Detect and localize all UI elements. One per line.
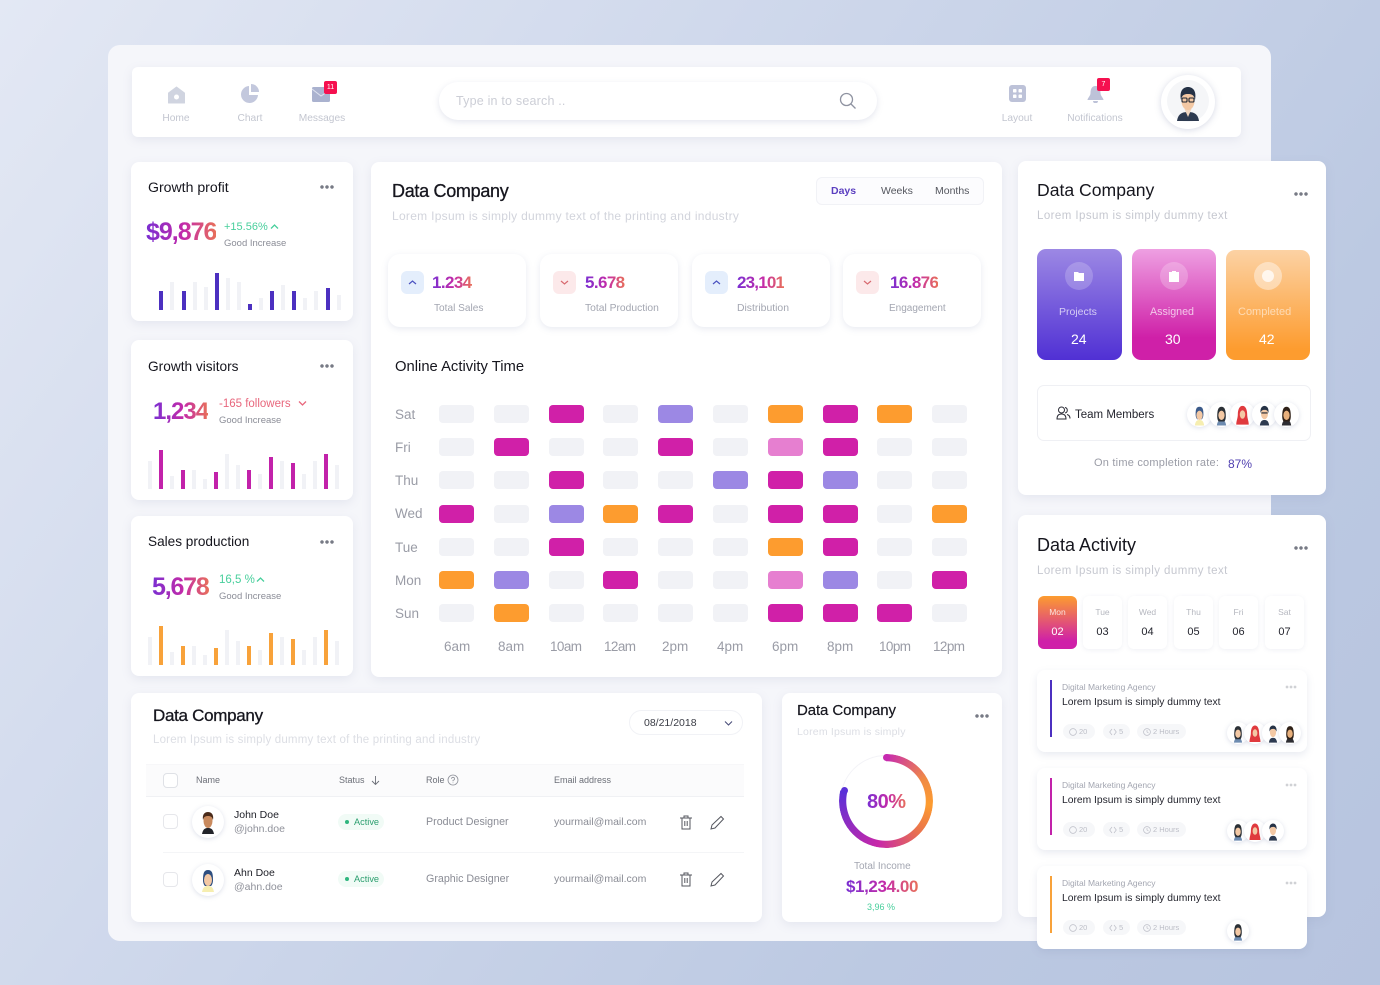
heading: Data Company: [797, 702, 896, 719]
label: Total Production: [585, 303, 659, 314]
status badge: Active: [354, 817, 379, 827]
bar chart: [148, 450, 339, 489]
metadata pills: 2 Hours: [1153, 825, 1179, 834]
panel: data activity: [1018, 515, 1326, 917]
table row: ahn doe: [163, 864, 724, 898]
date: 08/21/2018: [644, 717, 697, 729]
handle: @ahn.doe: [234, 881, 283, 893]
label: Team Members: [1075, 409, 1154, 421]
icon: chart: [241, 84, 259, 103]
gauge value: 80%: [867, 791, 906, 813]
subheading: Lorem Ipsum is simply dummy text of the printing and industry: [392, 209, 739, 223]
arrow down: [856, 271, 879, 294]
value: 30: [1165, 331, 1181, 347]
text: 4pm: [717, 639, 743, 654]
subheading: Lorem Ipsum is simply dummy text: [1037, 210, 1228, 222]
avatar: [192, 864, 224, 896]
checkbox: [163, 773, 178, 788]
icon: delete: [680, 872, 692, 886]
label: chart: Chart: [238, 113, 262, 124]
text: 8am: [498, 639, 524, 654]
caption: Good Increase: [219, 591, 281, 602]
metadata pills: [1063, 822, 1186, 837]
completion value: 87%: [1228, 457, 1252, 471]
text: 03: [1096, 626, 1109, 638]
label: messages: Messages: [299, 113, 345, 124]
value: 24: [1071, 331, 1087, 347]
tab: weeks: Weeks: [881, 185, 913, 197]
name: Ahn Doe: [234, 867, 275, 879]
activity card 1: [1037, 670, 1307, 752]
icon: search: [840, 92, 856, 109]
role: Product Designer: [426, 816, 509, 828]
label: Assigned: [1150, 306, 1194, 318]
panel: total income: [782, 693, 1002, 922]
metadata pills: 2 Hours: [1153, 923, 1179, 932]
metadata pills: 5: [1119, 727, 1123, 736]
icon: [1065, 262, 1093, 290]
chevron up: [270, 224, 278, 229]
text: 04: [1141, 626, 1154, 638]
status badge: [338, 814, 384, 830]
avatar group: [1226, 722, 1302, 746]
avatar group: [1186, 402, 1300, 430]
main panel background: [108, 45, 1271, 941]
icon: [1254, 262, 1282, 290]
category: Digital Marketing Agency: [1062, 682, 1156, 692]
title: Lorem Ipsum is simply dummy text: [1062, 697, 1220, 708]
status badge: Active: [354, 874, 379, 884]
category: Digital Marketing Agency: [1062, 780, 1156, 790]
icon: delete: [680, 816, 692, 830]
text: 07: [1278, 626, 1291, 638]
icon: messages with badge: 11: [327, 84, 334, 91]
metadata pills: 5: [1119, 825, 1123, 834]
text: Mon: [395, 573, 421, 588]
label: Projects: [1059, 306, 1097, 318]
icon: home: [168, 86, 185, 104]
arrow up: [401, 271, 424, 294]
donut gauge 80%: [839, 754, 933, 848]
range tabs: [816, 177, 984, 205]
icon: edit: [710, 816, 724, 830]
bar chart: [148, 626, 339, 665]
top navigation bar: [132, 67, 1241, 137]
text: 6pm: [772, 639, 798, 654]
day: mon 02: Mon: [1049, 607, 1066, 617]
menu dots: [320, 185, 334, 189]
search box: [439, 82, 877, 120]
icon: help: [448, 774, 458, 786]
heading: Growth visitors: [148, 359, 239, 374]
menu dots: [1294, 192, 1308, 196]
panel: data company main: [371, 162, 1002, 677]
label: Total Sales: [434, 303, 483, 314]
text: 6am: [444, 639, 470, 654]
text: 12pm: [933, 639, 964, 654]
tab: days: Days: [831, 185, 856, 197]
text: 2pm: [662, 639, 688, 654]
icon: layout: [1009, 85, 1026, 102]
title: Lorem Ipsum is simply dummy text: [1062, 893, 1220, 904]
panel: sales production: [131, 516, 353, 676]
chevron up: [256, 577, 264, 582]
text: Sat: [395, 407, 415, 422]
menu dots: [1294, 546, 1308, 550]
text: Sun: [395, 606, 419, 621]
stat: total sales: [388, 254, 526, 327]
caption: Good Increase: [224, 238, 286, 249]
heading: Data Company: [1037, 180, 1154, 200]
checkbox: [163, 814, 178, 829]
text: Fri: [1234, 607, 1243, 617]
heading: Growth profit: [148, 179, 229, 195]
label: notifications: Notifications: [1067, 113, 1123, 124]
role: Graphic Designer: [426, 873, 509, 885]
text: 8pm: [827, 639, 853, 654]
icon: sort arrow: [372, 776, 380, 785]
avatar: user profile: [1161, 75, 1215, 129]
handle: @john.doe: [234, 823, 285, 835]
metadata pills: 20: [1079, 727, 1087, 736]
subheading: Lorem Ipsum is simply dummy text: [1037, 565, 1228, 577]
icon: team: [1056, 406, 1070, 420]
email: yourmail@mail.com: [554, 873, 646, 885]
day: mon 02: 02: [1051, 626, 1064, 638]
menu dots: [320, 540, 334, 544]
dots: [1285, 685, 1297, 689]
metadata pills: 20: [1079, 923, 1087, 932]
row divider: [163, 852, 744, 853]
menu dots: [320, 364, 334, 368]
text: 12am: [604, 639, 635, 654]
category: Digital Marketing Agency: [1062, 878, 1156, 888]
subheading: Lorem Ipsum is simply: [797, 726, 906, 738]
chevron: [724, 721, 732, 726]
stat: total production: [540, 254, 678, 327]
amount: $1,234.00: [846, 877, 918, 896]
label: Distribution: [737, 303, 789, 314]
accent bar: [1050, 680, 1052, 737]
panel: data company table: [131, 693, 762, 922]
bar chart: [159, 273, 341, 310]
accent bar: [1050, 778, 1052, 835]
stat: engagement: [843, 254, 981, 327]
heading: Data Company: [153, 706, 263, 725]
value: 5.678: [585, 273, 625, 292]
value: 5,678: [152, 573, 209, 601]
email: yourmail@mail.com: [554, 816, 646, 828]
column: role: Role: [426, 775, 445, 785]
icon: notifications with badge: [1088, 78, 1110, 103]
day: mon 02: [1038, 596, 1077, 649]
text: Fri: [395, 440, 411, 455]
label: Completed: [1238, 306, 1291, 318]
activity card 3: [1037, 866, 1307, 949]
text: 05: [1187, 626, 1200, 638]
value: 42: [1259, 331, 1275, 347]
value: 1.234: [432, 273, 472, 292]
label: layout: Layout: [1002, 113, 1032, 124]
label: Total Income: [854, 861, 911, 872]
arrow down: [553, 271, 576, 294]
name: John Doe: [234, 809, 279, 821]
column: name: Name: [196, 775, 220, 785]
heading: online activity time: Online Activity Time: [395, 359, 524, 375]
icon: [1160, 262, 1188, 290]
icon: messages with badge: [312, 81, 337, 102]
label: Engagement: [889, 303, 946, 314]
heading: data company: Data Company: [392, 181, 508, 201]
avatar: [192, 806, 224, 838]
text: Thu: [1186, 607, 1201, 617]
text: Tue: [395, 540, 418, 555]
card: assigned: [1132, 249, 1216, 360]
status badge: [338, 871, 384, 887]
subheading: Lorem Ipsum is simply dummy text of the printing and industry: [153, 734, 480, 746]
avatar group: [1226, 820, 1286, 844]
metadata pills: [1063, 920, 1186, 935]
text: Sat: [1278, 607, 1291, 617]
dots: [1285, 881, 1297, 885]
value: 16.876: [890, 273, 938, 292]
accent bar: [1050, 876, 1052, 933]
date strip: [1038, 596, 1299, 650]
change: +15.56%: [224, 221, 268, 233]
avatar: [1227, 920, 1249, 942]
caption: Good Increase: [219, 415, 281, 426]
change: -165 followers: [219, 398, 291, 410]
icon: edit: [710, 872, 724, 887]
value: $9,876: [146, 218, 216, 246]
date picker: [629, 710, 743, 735]
team members box: [1037, 385, 1311, 441]
completion rate: On time completion rate:: [1094, 457, 1219, 469]
percentage: 3,96 %: [867, 902, 895, 912]
search placeholder: Type in to search ..: [456, 94, 566, 108]
activity card 2: [1037, 768, 1307, 850]
metadata pills: 2 Hours: [1153, 727, 1179, 736]
icon: notifications with badge: 7: [1102, 81, 1105, 88]
panel: growth visitors: [131, 340, 353, 500]
change: 16,5 %: [219, 574, 255, 586]
column: email: Email address: [554, 775, 611, 785]
card: completed: [1226, 250, 1310, 360]
text: 10am: [550, 639, 581, 654]
metadata pills: [1063, 724, 1186, 739]
tab: months: Months: [935, 185, 969, 197]
table header row: [146, 764, 744, 797]
title: Lorem Ipsum is simply dummy text: [1062, 795, 1220, 806]
metadata pills: 20: [1079, 825, 1087, 834]
chevron down: [298, 401, 306, 406]
panel: data company right: [1018, 161, 1326, 495]
heatmap: online activity: [395, 405, 967, 654]
heading: Data Activity: [1037, 535, 1136, 555]
text: Thu: [395, 473, 418, 488]
column: status: Status: [339, 775, 365, 785]
arrow up: [705, 271, 728, 294]
table row: john doe: [163, 806, 724, 840]
panel: growth profit: [131, 162, 353, 321]
dots: [1285, 783, 1297, 787]
heading: Sales production: [148, 534, 249, 549]
text: Wed: [1139, 607, 1156, 617]
stat: distribution: [692, 254, 830, 327]
menu dots: [975, 714, 989, 718]
text: 10pm: [879, 639, 910, 654]
metadata pills: 5: [1119, 923, 1123, 932]
text: Wed: [395, 506, 423, 521]
label: home: Home: [162, 113, 190, 124]
text: 06: [1232, 626, 1245, 638]
text: Tue: [1095, 607, 1110, 617]
card: projects: [1037, 249, 1122, 360]
checkbox: [163, 872, 178, 887]
value: 1,234: [153, 398, 208, 425]
value: 23,101: [737, 273, 784, 292]
